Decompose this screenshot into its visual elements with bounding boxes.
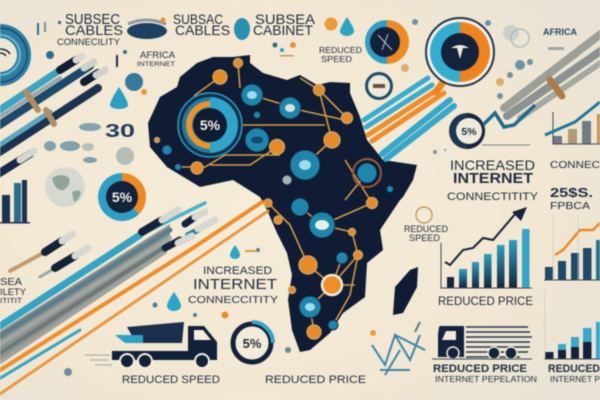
map: Africa silhouette: [148, 55, 417, 352]
text: subsea cabinet: CABINET: [253, 22, 313, 38]
title text: subsec cables: SUBSEC: [65, 12, 120, 28]
gauge: bottom 5%: [233, 322, 273, 362]
text: reduced speed middle: [404, 224, 448, 244]
panel: map of Africa: [148, 55, 418, 352]
text: FPBCA label: FPBCA: [550, 200, 590, 212]
icon: drops and small marks left of map: [64, 245, 291, 376]
main 5% gauge: [178, 93, 242, 157]
bar chart: upper right: [545, 102, 600, 144]
truck: right: [432, 326, 532, 359]
icon: water drop: [110, 87, 128, 109]
icon: globe: [45, 167, 85, 207]
panel: top-left cables: [0, 28, 105, 174]
circuit lines: [178, 63, 372, 332]
text: sea safety partial left: ILETY: [0, 287, 27, 298]
text: increased internet connectivity right: INCREASED: [450, 157, 535, 173]
bar chart: right upper with trend: [544, 215, 600, 280]
text: increased internet connectivity left: CONNECCITITY: [188, 295, 278, 306]
bar chart: right lower: [544, 290, 600, 359]
bar chart: reduced price: [441, 207, 532, 288]
text: reduced speed middle: SPEED: [409, 233, 440, 244]
text: reduced speed top: REDUCED: [319, 45, 362, 55]
text: sea safety partial left: [0, 276, 27, 305]
icon: teal blob: [234, 18, 250, 40]
icon: scattered right doodles: [401, 19, 564, 154]
text: subsac cables: SUBSAC: [173, 11, 223, 27]
text: subsea cabinet: [253, 11, 316, 38]
truck: left: [85, 322, 217, 368]
donut: map gauge: [365, 20, 409, 64]
text: subsea cabinet: SUBSEA: [255, 11, 316, 27]
text: sea safety partial left: ITITIT: [0, 298, 23, 305]
bar chart: left edge: [0, 180, 30, 224]
icon: scattered map sketches: [44, 123, 134, 165]
donut: left 5%: 5%: [112, 189, 133, 205]
donut: right 5% with trend: 5%: [461, 126, 477, 138]
text: increased internet connectivity left: INTERNET: [193, 277, 277, 293]
text: africa label right: AFRICA: [543, 27, 577, 38]
text: connec right edge: CONNEC: [550, 159, 600, 171]
text: reduced speed bottom: REDUCED SPEED: [122, 374, 220, 386]
donut: left 5%: [98, 173, 146, 221]
text: reduced price internet pepelation: [433, 363, 537, 384]
text: reduced price internet pepelation: INTERNET PEPELATION: [435, 374, 537, 384]
cables with connectors: [0, 56, 105, 174]
text: 25$S label: 25$S.: [550, 186, 593, 200]
teal nodes: [162, 84, 394, 330]
gauge: bottom 5%: 5%: [243, 336, 262, 351]
icon: orange badge and drop: [324, 17, 354, 36]
number: 30: 30: [105, 121, 135, 141]
icon: scattered top doodles: [37, 21, 296, 95]
icon: cable spool: [127, 18, 167, 39]
text: increased internet connectivity left: INCREASED: [203, 265, 272, 277]
main 5% gauge: 5%: [200, 117, 221, 133]
text: reduced speed top: SPEED: [321, 54, 352, 64]
gauge: top centre: [426, 18, 494, 86]
text: increased internet connectivity right: INTERNET: [453, 171, 533, 187]
text: africa internet: [137, 50, 176, 68]
ringed node: [353, 159, 381, 187]
text: reduced price chart label: REDUCED PRICE: [438, 296, 533, 308]
icon: small ring above label: [416, 207, 432, 223]
map: Madagascar: [393, 267, 418, 315]
text: cables: CABLES: [65, 22, 123, 38]
text: reduced speed middle: REDUCED: [404, 224, 448, 235]
text: connecility: CONNECILITY: [57, 37, 121, 48]
text: subsac cables: [173, 11, 230, 38]
icon: small ring badge: [366, 74, 392, 98]
text: increased internet connectivity right: CONNECTITITY: [447, 191, 539, 203]
text: increased internet connectivity right: [447, 157, 539, 203]
node inner glyphs: [247, 91, 329, 311]
text: reduced internet right edge: [548, 363, 600, 384]
arrow: central cable bundle: [364, 78, 454, 159]
icon: cable coil: [0, 28, 27, 82]
orange node with ring: [322, 275, 342, 295]
panel: large diagonal cable bundle: [0, 202, 268, 396]
cables: small left connectors: [10, 234, 88, 277]
text: sea safety partial left: SEA: [0, 276, 22, 288]
icon: broken sketch near bottom centre: [370, 322, 425, 375]
donut: right 5% with trend: [449, 105, 535, 149]
text: africa internet: AFRICA: [140, 50, 176, 61]
text: subsac cables: CABLES: [175, 22, 230, 38]
text: reduced speed top: [319, 45, 362, 64]
text: reduced internet right edge: INTERNET P: [550, 374, 600, 384]
text: increased internet connectivity left: [188, 265, 278, 306]
panel: grey cables right: [504, 33, 600, 118]
text: africa internet: INTERNET: [137, 61, 175, 68]
orange nodes: [154, 58, 378, 339]
text: reduced price internet pepelation: REDUCED PRICE: [433, 363, 527, 375]
text: reduced price bottom: REDUCED PRICE: [265, 374, 366, 386]
